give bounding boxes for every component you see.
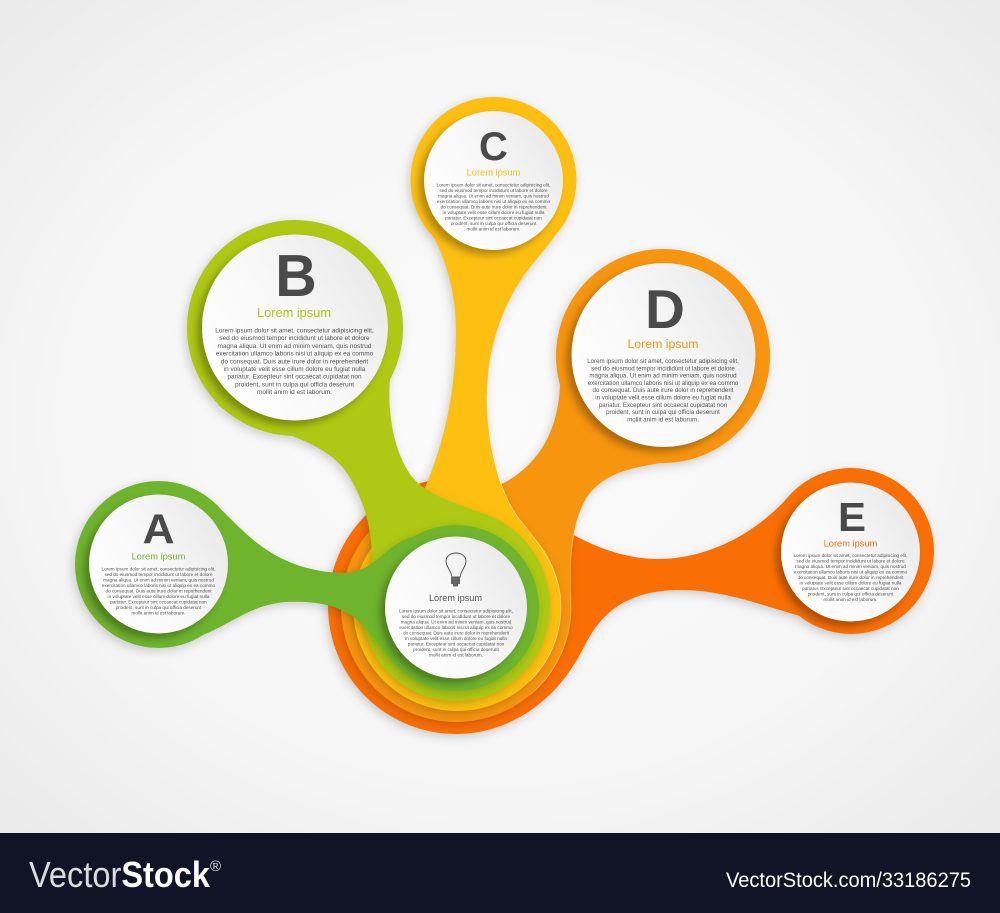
text block B: proident, sunt in culpa qui officia deserunt	[235, 381, 354, 388]
panel: A	[89, 494, 228, 634]
text block A: magna aliqua. Ut enim ad minim veniam, quis nostrud	[103, 578, 214, 582]
text block centre: pariatur. Excepteur sint occaecat cupidatat non	[408, 642, 505, 646]
text block centre: in voluptate velit esse cillum dolore eu fugiat nulla	[405, 636, 507, 641]
text block D: exercitation ullamco laboris nisi ut aliquip ex ea commo	[588, 380, 739, 387]
text block B: Lorem ipsum dolor sit amet, consectetur adipisicing elit,	[215, 328, 374, 334]
text block B: magna aliqua. Ut enim ad minim veniam, quis nostrud	[218, 343, 372, 350]
text block centre: sed do eiusmod tempor incididunt ut labore et dolore	[402, 614, 510, 619]
text block C: do consequat. Duis aute irure dolor in reprehenderit	[440, 205, 547, 210]
text block E: mollit anim id est laborum.	[824, 597, 877, 602]
text block centre: exercitation ullamco laboris nisi ut aliquip ex ea commo	[399, 625, 513, 630]
text block C: pariatur. Excepteur sint occaecat cupidatat non	[445, 215, 542, 220]
text block E: in voluptate velit esse cillum dolore eu fugiat nulla	[800, 580, 902, 586]
text block A: in voluptate velit esse cillum dolore eu fugiat nulla	[108, 594, 210, 599]
text block C: Lorem ipsum dolor sit amet, consectetur adipisicing elit,	[436, 183, 551, 188]
shape: amber branch D	[341, 249, 770, 722]
text block B: in voluptate velit esse cillum dolore eu fugiat nulla	[224, 366, 366, 373]
letter E: E	[838, 494, 866, 540]
text block C: mollit anim id est laborum.	[467, 226, 520, 231]
letter A: A	[142, 506, 174, 552]
letter C: C	[479, 125, 508, 169]
heading E: Lorem ipsum	[824, 538, 878, 548]
text block centre: do consequat. Duis aute irure dolor in reprehenderit	[403, 630, 510, 636]
text block C: magna aliqua. Ut enim ad minim veniam, quis nostrud	[438, 194, 549, 199]
image id: VectorStock.com/33186275	[726, 869, 971, 892]
text block C: exercitation ullamco laboris nisi ut aliquip ex ea commo	[437, 199, 551, 204]
text block E: magna aliqua. Ut enim ad minim veniam, quis nostrud	[795, 564, 906, 569]
text block B: do consequat. Duis aute irure dolor in reprehenderit	[221, 358, 368, 365]
text block A: pariatur. Excepteur sint occaecat cupidatat non	[110, 600, 207, 604]
text block B: mollit anim id est laborum.	[257, 389, 332, 396]
registered mark: ®	[210, 858, 221, 875]
letter B: B	[275, 243, 317, 309]
panel: B	[202, 234, 388, 420]
text block B: pariatur. Excepteur sint occaecat cupidatat non	[227, 374, 362, 381]
text block D: in voluptate velit esse cillum dolore eu fugiat nulla	[595, 394, 731, 402]
text block A: Lorem ipsum dolor sit amet, consectetur adipisicing elit,	[101, 566, 216, 572]
panel: D	[572, 263, 756, 447]
panel: C	[424, 111, 563, 250]
text block centre: proident, sunt in culpa qui officia deserunt	[413, 647, 499, 652]
text block centre: Lorem ipsum dolor sit amet, consectetur adipisicing elit,	[399, 608, 513, 614]
text block E: Lorem ipsum dolor sit amet, consectetur adipisicing elit,	[793, 553, 908, 558]
text block D: do consequat. Duis aute irure dolor in reprehenderit	[592, 387, 734, 394]
logo: VectorStock	[29, 854, 211, 895]
text block C: proident, sunt in culpa qui officia deserunt	[451, 221, 537, 226]
heading C: Lorem ipsum	[467, 168, 521, 178]
text block D: pariatur. Excepteur sint occaecat cupidatat non	[599, 402, 728, 409]
panel: E	[781, 482, 920, 622]
heading A: Lorem ipsum	[132, 552, 186, 562]
text block E: exercitation ullamco laboris nisi ut aliquip ex ea commo	[794, 570, 908, 574]
text block E: do consequat. Duis aute irure dolor in reprehenderit	[797, 575, 904, 580]
text block D: magna aliqua. Ut enim ad minim veniam, quis nostrud	[589, 373, 737, 380]
text block E: sed do eiusmod tempor incididunt ut labore et dolore	[796, 558, 905, 564]
text block C: in voluptate velit esse cillum dolore eu fugiat nulla	[443, 210, 545, 215]
letter D: D	[645, 278, 685, 340]
heading centre: Lorem ipsum	[429, 593, 482, 603]
text block A: proident, sunt in culpa qui officia deserunt	[116, 605, 202, 610]
watermark bar	[0, 833, 1000, 913]
text block A: mollit anim id est laborum.	[132, 610, 185, 616]
text block B: exercitation ullamco laboris nisi ut aliquip ex ea commo	[216, 351, 374, 358]
text block A: sed do eiusmod tempor incididunt ut labore et dolore	[104, 572, 213, 577]
text block A: do consequat. Duis aute irure dolor in reprehenderit	[105, 588, 212, 594]
text block D: proident, sunt in culpa qui officia deserunt	[606, 409, 720, 416]
text block C: sed do eiusmod tempor incididunt ut labore et dolore	[439, 188, 548, 193]
shape: lime branch B	[187, 220, 550, 701]
icon: light bulb	[446, 553, 466, 586]
text block E: pariatur. Excepteur sint occaecat cupidatat non	[802, 586, 899, 591]
text block D: mollit anim id est laborum.	[627, 416, 699, 423]
text block centre: magna aliqua. Ut enim ad minim veniam, quis nostrud	[401, 620, 512, 624]
text block centre: mollit anim id est laborum.	[429, 652, 483, 658]
text block E: proident, sunt in culpa qui officia deserunt	[808, 592, 894, 596]
shape: orange branch E	[328, 468, 934, 734]
text block D: Lorem ipsum dolor sit amet, consectetur adipisicing elit,	[587, 358, 739, 365]
shape: green branch A	[75, 481, 539, 691]
text block B: sed do eiusmod tempor incididunt ut labore et dolore	[219, 335, 370, 342]
text block D: sed do eiusmod tempor incididunt ut labore et dolore	[591, 365, 735, 372]
panel: centre	[385, 536, 527, 678]
heading B: Lorem ipsum	[257, 305, 331, 320]
shape: yellow branch C	[353, 97, 576, 711]
heading D: Lorem ipsum	[627, 337, 699, 351]
text block A: exercitation ullamco laboris nisi ut aliquip ex ea commo	[102, 583, 216, 588]
